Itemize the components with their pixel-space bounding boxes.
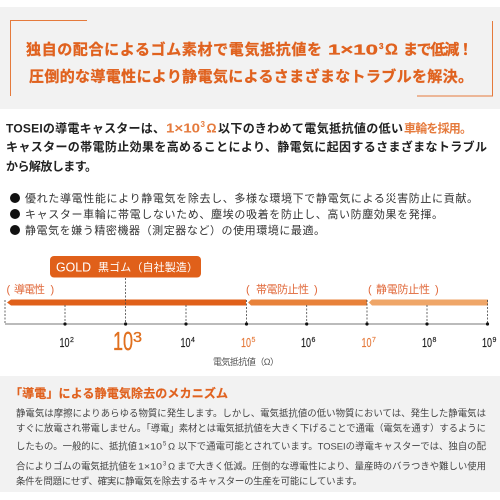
axis tick labels: 2 [70, 337, 74, 344]
headline text: まで低減！ [403, 42, 473, 58]
panel: headline [0, 7, 500, 109]
range label: antistatic: ( [246, 284, 250, 296]
headline text: 圧倒的な導電性により静電気によるさまざまなトラブルを解決。 [29, 68, 473, 86]
intro text block: Ω [206, 122, 217, 136]
intro text block: TOSEIの導電キャスターは、 [6, 120, 165, 136]
range label: antistatic: 帯電防止性 [256, 282, 309, 296]
mechanism body text: 1×10 [138, 462, 162, 472]
mechanism body text: まで大きく低減。圧倒的な導電性により、量産時のバラつきや難しい使用 [177, 460, 486, 472]
range bars [7, 300, 488, 306]
range label: conductive [6, 282, 54, 296]
range label: static dissipative: ) [435, 284, 439, 296]
mechanism body text: 合によりゴムの電気抵抗値を [16, 460, 137, 472]
axis tick labels: 7 [372, 337, 376, 344]
axis with ticks [5, 278, 489, 326]
intro text block [6, 120, 487, 174]
axis tick labels: 10 [180, 335, 190, 350]
mechanism body text: 1×10 [138, 442, 162, 452]
bullet list [10, 191, 478, 237]
axis tick labels: 10 [60, 335, 70, 350]
intro text block: 以下のきわめて電気抵抗値の低い [218, 120, 403, 136]
resistance scale chart [5, 256, 496, 367]
badge: GOLD black rubber [50, 256, 201, 278]
intro text block: 車輪を採用。 [404, 120, 472, 136]
intro text block: キャスターの帯電防止効果を高めることにより、静電気に起因するさまざまなトラブル [6, 139, 487, 154]
panel: mechanism [0, 376, 500, 492]
intro text block: 1×10 [166, 120, 200, 136]
headline text: 3 [379, 42, 384, 51]
mechanism body text [16, 408, 487, 486]
badge: GOLD black rubber: GOLD [56, 260, 91, 274]
mechanism heading: 「導電」による静電気除去のメカニズム [10, 386, 228, 400]
badge: GOLD black rubber: 黒ゴム（自社製造） [98, 260, 198, 274]
axis tick labels: 4 [191, 337, 195, 344]
range label: conductive: 導電性 [14, 282, 45, 296]
axis tick labels: 10 [422, 335, 432, 350]
range label: antistatic [246, 282, 318, 296]
axis tick labels: 10 [482, 335, 492, 350]
mechanism body text: 3 [163, 462, 167, 468]
headline bracket frame [10, 20, 492, 96]
axis tick labels: 3 [133, 329, 142, 346]
axis tick labels: 10 [362, 335, 372, 350]
axis tick labels: 9 [492, 337, 496, 344]
range label: antistatic: ) [314, 284, 318, 296]
range label: static dissipative: ( [368, 284, 372, 296]
mechanism body text: 以下で通電可能とされています。TOSEIの導電キャスターでは、独自の配 [178, 440, 487, 452]
axis tick labels: 10 [301, 335, 311, 350]
bullet list: 優れた導電性能により静電気を除去し、多様な環境下で静電気による災害防止に貢献。 [25, 191, 478, 205]
mechanism body text: 条件を問題にせず、確実に静電気を除去するキャスターの生産を可能にしています。 [16, 476, 362, 486]
headline text: 1×10 [328, 42, 378, 58]
mechanism body text: すぐに放電され帯電しません。「導電」素材とは電気抵抗値を大きく下げることで通電（電気を通す）するように [16, 422, 486, 434]
headline text: Ω [385, 42, 398, 58]
range label: static dissipative [368, 282, 439, 296]
axis title: 電気抵抗値（Ω） [213, 356, 279, 367]
bullet list: キャスター車輪に帯電しないため、塵埃の吸着を防止し、高い防塵効果を発揮。 [25, 207, 443, 221]
axis tick labels [60, 326, 496, 356]
axis tick labels: 10 [241, 335, 251, 350]
mechanism body text: Ω [168, 442, 175, 452]
mechanism body text: したもの。一般的に、抵抗値 [16, 440, 137, 452]
axis tick labels: 5 [252, 337, 256, 344]
axis tick labels: 8 [432, 337, 436, 344]
range label: conductive: ( [6, 284, 10, 296]
intro text block: 3 [200, 120, 206, 129]
range label: conductive: ) [50, 284, 54, 296]
mechanism body text: 静電気は摩擦によりあらゆる物質に発生します。しかし、電気抵抗値の低い物質においては、発生した静電気は [16, 408, 486, 418]
mechanism body text: Ω [168, 462, 175, 472]
bullet list: 静電気を嫌う精密機器（測定器など）の使用環境に最適。 [25, 223, 325, 237]
axis tick labels: 10 [113, 326, 133, 356]
headline text: 独自の配合によるゴム素材で電気抵抗値を [26, 40, 322, 58]
axis tick labels: 6 [312, 337, 316, 344]
intro text block: から解放します。 [6, 158, 97, 174]
mechanism body text: 5 [163, 442, 167, 448]
headline text [26, 40, 473, 86]
range label: static dissipative: 静電防止性 [376, 282, 430, 296]
